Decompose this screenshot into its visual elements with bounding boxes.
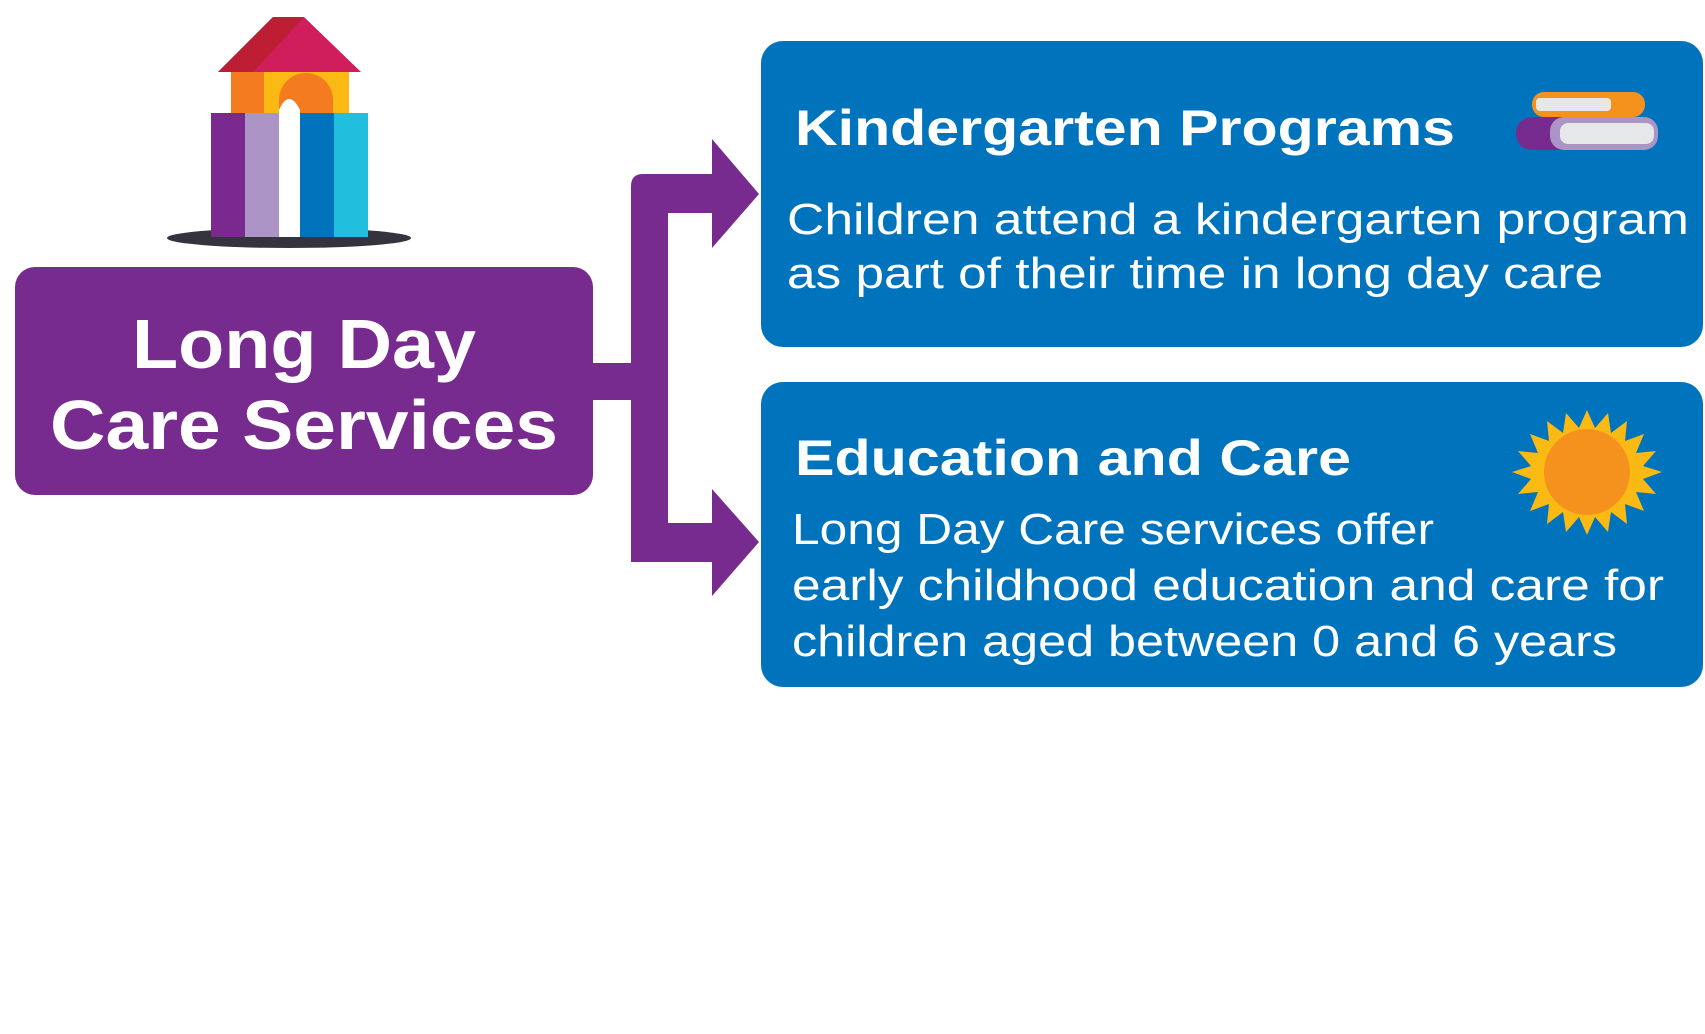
icon: books	[1516, 92, 1658, 150]
arrow: branching connector	[590, 139, 759, 596]
panel: Education and Care: Education and Care	[795, 430, 1351, 486]
icon: toy block house	[167, 17, 411, 248]
panel: Education and Care: early childhood education and care for	[792, 561, 1664, 610]
panel: Kindergarten Programs	[761, 41, 1703, 347]
panel: Education and Care: children aged between 0 and 6 years	[792, 617, 1617, 666]
panel: Kindergarten Programs: Kindergarten Programs	[795, 100, 1455, 156]
panel: Education and Care: Long Day Care services offer	[792, 505, 1434, 554]
panel: Long Day Care Services: Care Services	[50, 386, 558, 464]
panel: Education and Care	[761, 382, 1703, 687]
panel: Kindergarten Programs: Children attend a kindergarten program	[787, 195, 1689, 244]
panel: Kindergarten Programs: as part of their time in long day care	[787, 249, 1603, 298]
icon: sun	[1512, 410, 1662, 535]
panel: Long Day Care Services	[15, 267, 593, 495]
panel: Long Day Care Services: Long Day	[132, 305, 476, 383]
